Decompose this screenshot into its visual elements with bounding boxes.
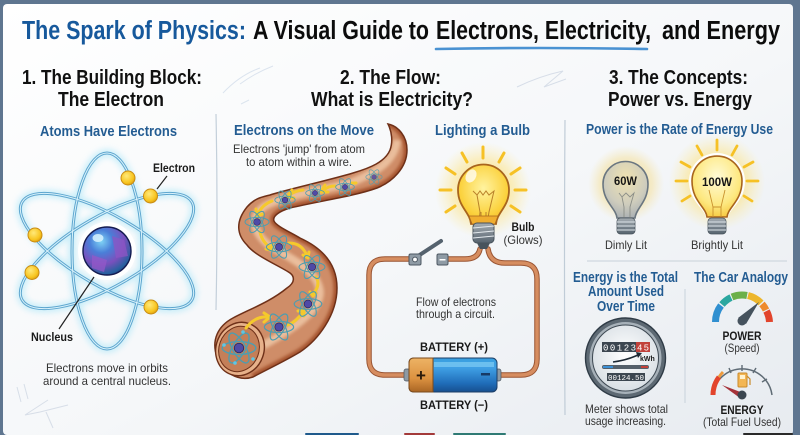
caption: meter usage [585, 402, 668, 428]
label: energy total fuel [703, 403, 781, 429]
caption: flow through circuit [416, 295, 496, 321]
subheading: energy is the total: Energy is the Total [573, 270, 678, 286]
icon: energy meter [586, 318, 666, 398]
icon: energy meter: kWh [640, 356, 655, 363]
atoms inside wire [222, 168, 382, 366]
panel: the flow [208, 66, 542, 412]
label: power speed: POWER [722, 329, 762, 343]
caption: electrons jump: Electrons 'jump' from atom [233, 142, 365, 156]
copper wire with moving electrons [208, 124, 407, 383]
subheading: lighting a bulb: Lighting a Bulb [435, 123, 530, 139]
icon: fuel pump [738, 373, 750, 387]
heading: section 3: 3. The Concepts: [609, 66, 748, 89]
subheading: atoms have electrons: Atoms Have Electrons [40, 124, 177, 140]
caption: electrons jump [233, 142, 365, 169]
panel: the concepts [573, 66, 788, 429]
heading: section 2: 2. The Flow: [340, 66, 441, 89]
icon: glowing bulb [435, 142, 531, 249]
wire end cap [208, 315, 272, 383]
heading: section 1: The Electron [58, 88, 164, 111]
icon: 100W bulb [669, 134, 765, 234]
label: energy total fuel: (Total Fuel Used) [703, 415, 781, 429]
label: brightly lit: Brightly Lit [691, 238, 744, 252]
caption: meter usage: usage increasing. [585, 414, 666, 428]
label: dimly lit: Dimly Lit [605, 238, 648, 252]
caption: flow through circuit: through a circuit. [416, 307, 495, 321]
circuit loop wire [369, 249, 537, 375]
caption: orbits [43, 361, 171, 388]
caption: flow through circuit: Flow of electrons [416, 295, 496, 309]
atom diagram [5, 153, 209, 349]
subheading: electrons on the move: Electrons on the Move [234, 123, 374, 139]
icon: energy fuel gauge [712, 365, 772, 400]
icon: battery: + [416, 366, 426, 385]
title: The Spark of Physics: [22, 17, 246, 45]
electrons [25, 171, 158, 314]
label: nucleus: Nucleus [31, 330, 73, 344]
caption: orbits: Electrons move in orbits [46, 361, 168, 375]
heading: section 1: 1. The Building Block: [22, 66, 202, 89]
caption: meter usage: Meter shows total [585, 402, 668, 416]
label: power speed: (Speed) [724, 341, 760, 355]
label: bulb glows: (Glows) [504, 233, 542, 247]
caption: electrons jump: to atom within a wire. [246, 155, 352, 169]
icon: 60W bulb: 60W [614, 174, 638, 188]
title: Electrons, Electricity, [436, 17, 651, 45]
panel: the electron [5, 66, 209, 388]
heading: section 2: What is Electricity? [311, 88, 473, 111]
icon: 60W bulb [588, 146, 664, 234]
heading: section 1 [22, 66, 202, 111]
label: power speed [722, 329, 762, 355]
heading: section 3 [608, 66, 752, 111]
icon: energy meter: 00123 [603, 344, 636, 354]
title [22, 17, 781, 49]
heading: section 2 [311, 66, 473, 111]
heading: section 3: Power vs. Energy [608, 88, 752, 111]
icon: battery [404, 358, 501, 392]
icon: power speed gauge [715, 295, 770, 326]
icon: 100W bulb: 100W [702, 175, 733, 189]
title: A Visual Guide to [253, 17, 429, 45]
subheading: energy is the total [573, 270, 678, 315]
icon: energy meter: 00124.50 [608, 375, 644, 383]
label: energy total fuel: ENERGY [720, 403, 764, 417]
label: bulb glows: Bulb [512, 220, 534, 234]
subheading: energy is the total: Amount Used [588, 284, 664, 300]
caption: orbits: around a central nucleus. [43, 374, 171, 388]
icon: nucleus [83, 227, 131, 275]
label: battery minus: BATTERY (−) [420, 398, 488, 412]
label: battery plus: BATTERY (+) [420, 340, 488, 354]
title: and Energy [662, 17, 781, 45]
icon: switch [409, 241, 448, 265]
subheading: energy is the total: Over Time [597, 299, 655, 315]
label: bulb glows [504, 220, 542, 247]
icon: energy meter: 45 [637, 344, 649, 354]
label: electron: Electron [153, 161, 195, 175]
